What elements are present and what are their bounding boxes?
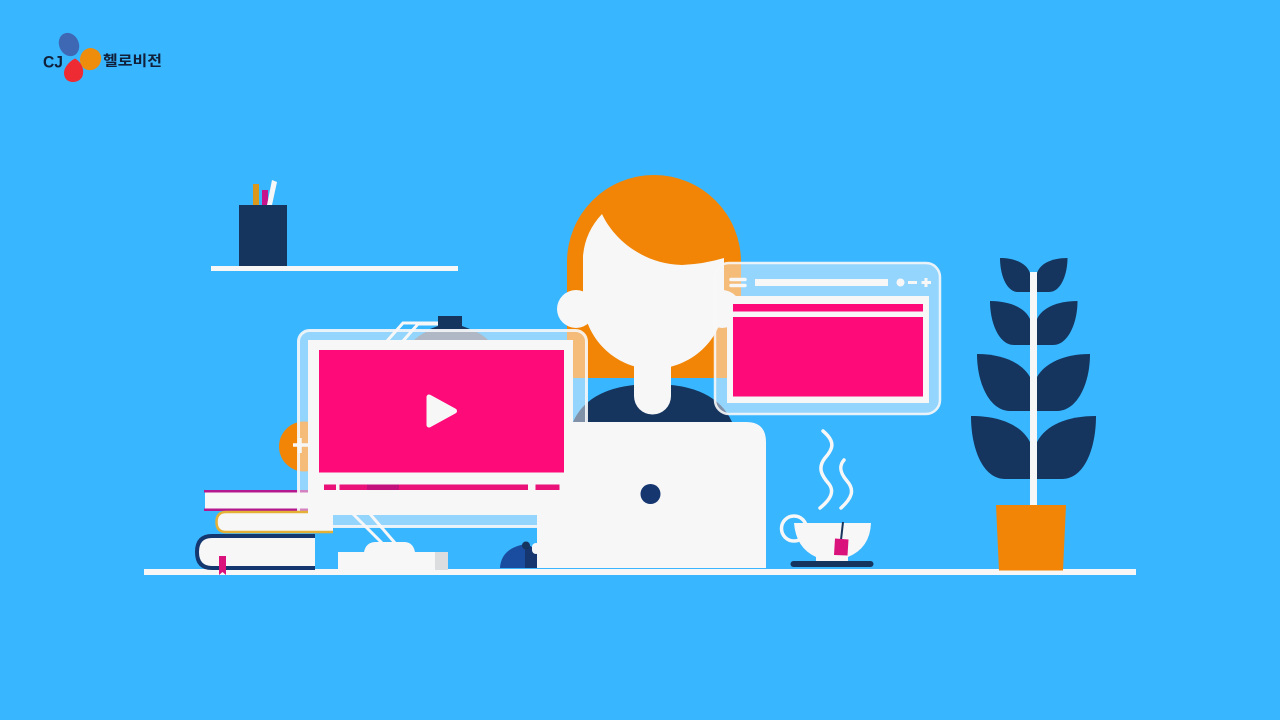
- lamp base side: [435, 552, 448, 570]
- tea bag tag: [834, 538, 848, 556]
- logo text: CJ: CJ: [43, 52, 63, 72]
- progress bar: [324, 484, 560, 490]
- logo petal: orange: [80, 48, 101, 70]
- pink content block: [733, 317, 923, 396]
- laptop logo: [640, 484, 660, 504]
- ear: left: [557, 290, 595, 328]
- shelf board: [211, 266, 458, 271]
- white player panel: [308, 340, 573, 515]
- pen holder: [239, 205, 287, 266]
- stack of books: [197, 490, 316, 575]
- book: bottom, navy edged: [197, 536, 315, 575]
- mouse: [500, 542, 540, 568]
- shelf with pen holder: [211, 180, 458, 271]
- saucer: [790, 561, 874, 567]
- browser window: [715, 263, 940, 414]
- lamp shade: [412, 329, 490, 342]
- video area: [319, 350, 564, 472]
- hamburger menu icon: [731, 280, 745, 286]
- pencil: magenta: [262, 190, 268, 205]
- logo text: company name: 헬로비전: [103, 53, 162, 70]
- hair: [567, 175, 741, 378]
- logo petal: blue: [55, 29, 83, 60]
- book: top, magenta edged: [204, 490, 316, 511]
- logo petal: red: [64, 58, 83, 82]
- desk surface: [144, 569, 1136, 575]
- play icon: [429, 397, 454, 425]
- tea bag string: [841, 522, 843, 540]
- glass frame: [298, 330, 586, 526]
- pink header bar: [733, 304, 923, 312]
- stem: [1030, 272, 1037, 506]
- white content panel: [727, 296, 929, 403]
- pot: [996, 505, 1066, 570]
- lamp base: [338, 542, 435, 570]
- ear: right: [703, 290, 741, 328]
- face: [583, 214, 724, 369]
- pencil: white: [267, 180, 277, 205]
- steam: [820, 431, 852, 508]
- video player window: [216, 330, 766, 568]
- cup handle: [782, 516, 806, 541]
- tea cup: [782, 431, 874, 567]
- laptop: [537, 422, 766, 568]
- desk lamp: [338, 316, 490, 570]
- glass frame: [715, 263, 940, 414]
- shoulders: [573, 384, 732, 422]
- person: [557, 175, 741, 422]
- bookmark: [219, 556, 226, 575]
- logo: CJ HelloVision: [43, 29, 162, 82]
- lamp cap: [430, 316, 470, 329]
- pencil: gold: [253, 184, 259, 205]
- neck: [634, 350, 671, 414]
- lamp arms: [353, 323, 438, 543]
- address bar: [755, 279, 888, 286]
- book: middle, yellow edged: [216, 512, 333, 532]
- leaves: [971, 258, 1096, 479]
- mouse cable notch: [532, 543, 540, 554]
- orange round badge with plus: [279, 422, 329, 472]
- potted plant: [971, 258, 1096, 570]
- window controls: [896, 278, 931, 287]
- cup body: [794, 523, 871, 562]
